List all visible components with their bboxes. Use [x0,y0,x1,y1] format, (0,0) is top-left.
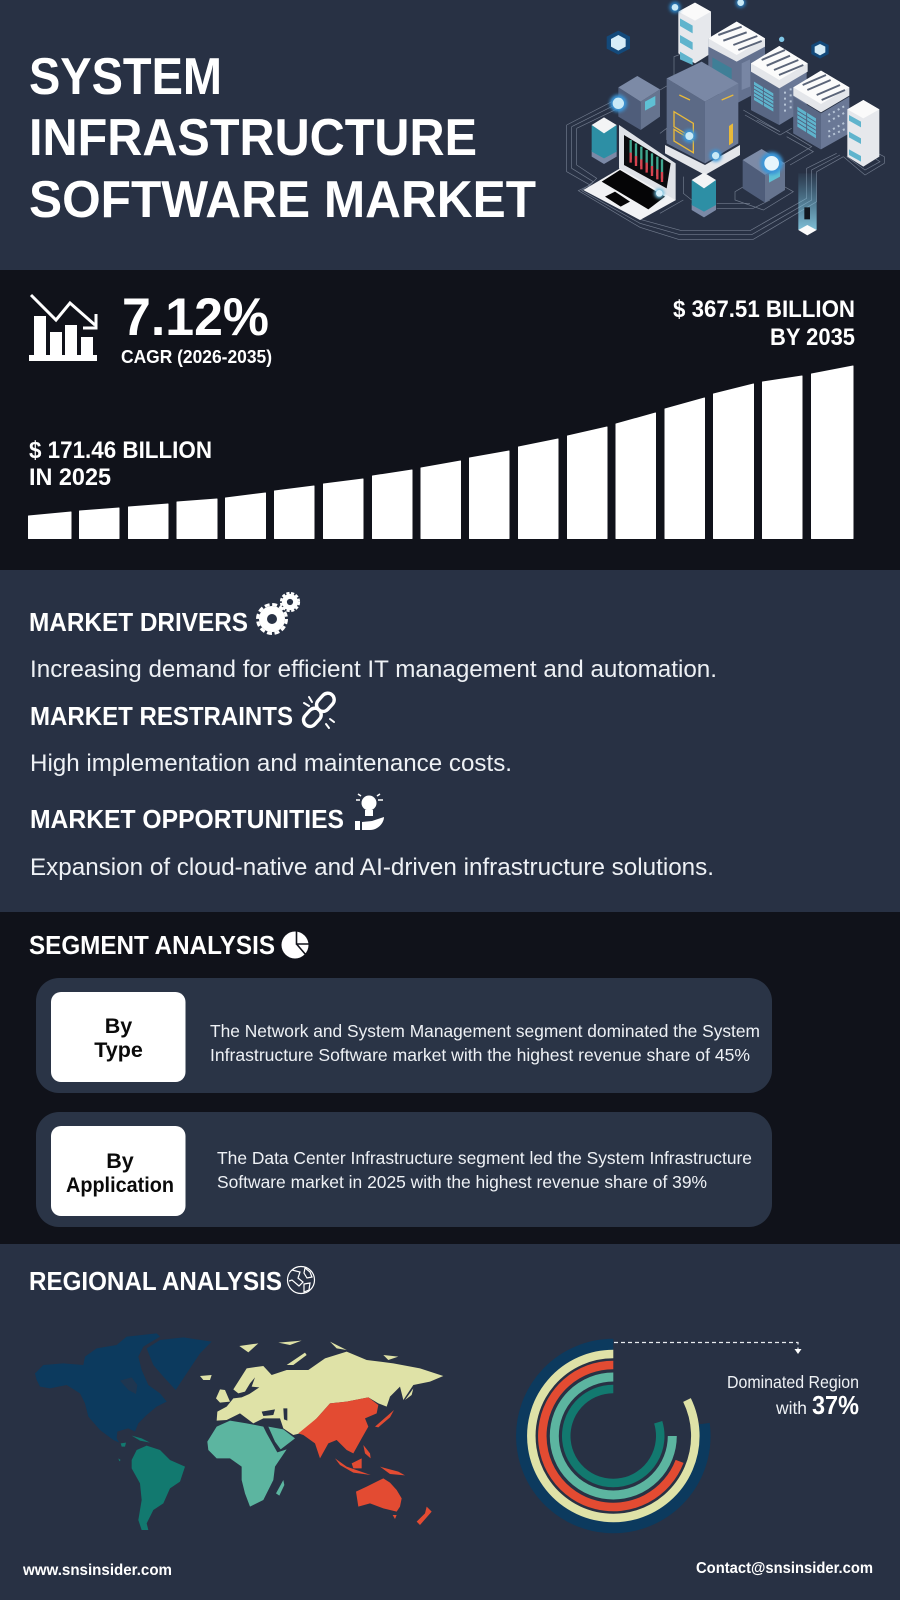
heading: regional analysis: REGIONAL ANALYSIS [29,1266,282,1296]
server B [751,46,808,125]
small server left [618,76,660,130]
title [29,48,536,229]
central tower [665,62,740,175]
arrow: dashed leader [614,1342,802,1354]
panel: segment analysis [0,912,900,1244]
row: by application [36,1112,772,1227]
cooling module left [592,117,617,164]
label box: by application: Application [66,1173,174,1197]
text: by application [217,1148,752,1192]
server A [708,22,765,103]
laptop [583,125,676,220]
title: INFRASTRUCTURE [29,109,477,167]
icon: chart with arrow [29,295,97,361]
panel: regional analysis [0,1244,900,1600]
hudson bay [120,1377,137,1394]
label box: by type [51,992,186,1082]
bar chart [28,366,853,538]
world map [35,1333,443,1530]
callout: dominated region [727,1372,859,1420]
text: by type: The Network and System Management segment dominated the System [210,1021,760,1041]
panel: market size [0,270,900,570]
footer: website: www.snsinsider.com [22,1562,172,1579]
icon: isometric data center illustration [567,0,884,239]
callout: dominated region: 37% [812,1390,859,1420]
light beam connector [798,173,817,235]
region: europe and north asia [200,1341,443,1435]
start value label [29,437,212,491]
callout: dominated region: Dominated Region [727,1372,859,1392]
small server front [743,149,785,203]
label box: by type: By [105,1014,132,1038]
start value label: $ 171.46 BILLION [29,437,212,464]
heading: market drivers: MARKET DRIVERS [29,607,248,637]
title: SYSTEM [29,48,222,106]
CAGR value: 7.12% [122,288,269,347]
title: SOFTWARE MARKET [29,171,536,229]
inland seas [262,1408,287,1421]
icon: globe [288,1266,314,1294]
text: drivers: Increasing demand for efficient IT management and automation. [30,656,717,683]
end value label: $ 367.51 BILLION [673,296,855,323]
text: by application: The Data Center Infrastructure segment led the System Infrastructure [217,1148,752,1168]
label box: by application [51,1126,186,1216]
radial bar chart [522,1344,705,1527]
panel: market dynamics [0,570,900,913]
heading: segment analysis: SEGMENT ANALYSIS [29,930,275,960]
footer: contact: Contact@snsinsider.com [696,1560,873,1577]
region: asia pacific [298,1397,432,1525]
region: north america [35,1333,212,1443]
panel: header [0,0,900,270]
server C [793,71,849,149]
text: restraints: High implementation and maintenance costs. [30,750,512,777]
cooling module front [692,173,716,217]
end value label: BY 2035 [770,324,855,351]
text: by type [210,1021,760,1065]
label box: by type: Type [94,1038,143,1062]
CAGR label: CAGR (2026-2035) [121,346,272,367]
region: latin america [118,1436,185,1530]
heading: market opportunities: MARKET OPPORTUNITIES [30,804,344,834]
icon: pie chart [282,931,310,958]
callout: dominated region: with [775,1398,807,1418]
region: africa and middle east [207,1421,295,1507]
heading: market restraints: MARKET RESTRAINTS [30,701,293,731]
server stack top [678,3,711,65]
text: opportunities: Expansion of cloud-native and AI-driven infrastructure solutions. [30,854,714,881]
glowing hexagons [607,0,829,198]
icon: idea in hand [355,794,384,830]
end value label [673,296,855,351]
icon: broken chain [301,691,337,729]
server stack right [847,100,879,167]
label box: by application: By [106,1149,134,1173]
text: by application: Software market in 2025 with the highest revenue share of 39% [217,1172,707,1192]
icon: gears [258,593,299,634]
row: by type [36,978,772,1093]
text: by type: Infrastructure Software market with the highest revenue share of 45% [210,1045,750,1065]
start value label: IN 2025 [29,464,111,491]
